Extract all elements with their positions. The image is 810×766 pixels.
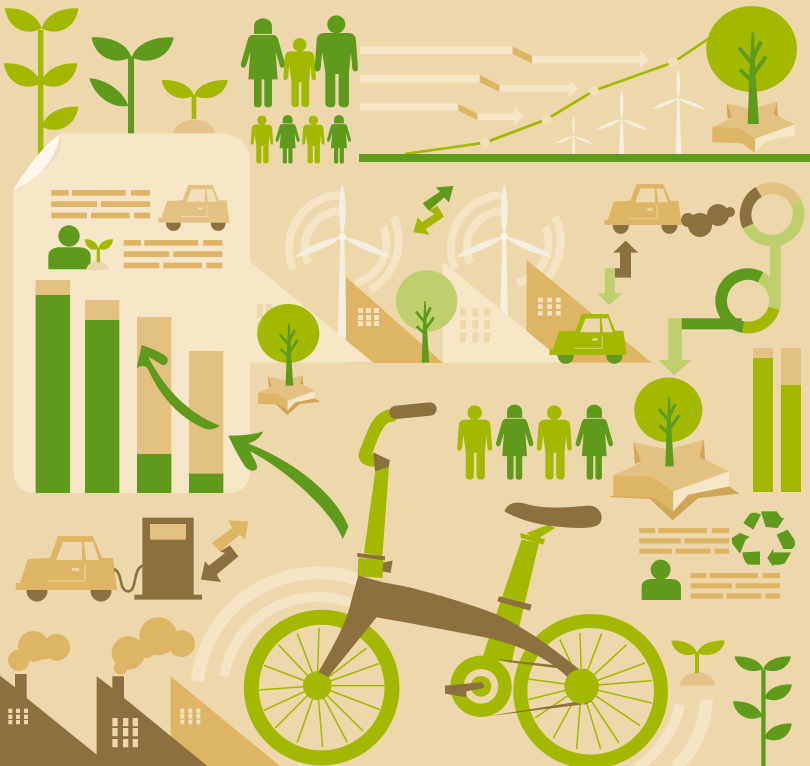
small people row [251,115,351,163]
arrow inside chart [137,345,220,429]
big curved arrow [228,431,348,539]
page curl [13,134,60,189]
bar chart [36,280,223,493]
upper ring [746,188,799,241]
handlebar grip [396,409,430,412]
wind flow arrows [360,47,649,125]
family of people icons [241,15,358,163]
icon: car in document [158,185,229,231]
saddle [504,503,602,528]
icon: lime car [550,314,627,364]
zigzag double arrow green [413,186,453,235]
tan factory [171,676,280,766]
wind turbine right with arcs [451,184,561,338]
plant: small seedling in soil [162,80,228,134]
front wheel [251,617,392,758]
light green tree [396,270,457,363]
tree on small star [256,304,320,415]
smoke clouds left [8,631,70,671]
chain ring and chain [445,656,582,717]
text lines right [639,528,729,554]
plant: tall lime sprout [4,8,78,163]
plant: medium green sprout [89,37,173,135]
text lines [51,190,150,218]
person bust icon [48,225,91,269]
wind turbine left with arcs [289,184,399,338]
bicycle [251,409,661,762]
exhaust smoke [681,204,735,237]
rear wheel [520,621,661,762]
rear hub [564,669,599,704]
icon: brown car [605,184,682,234]
down arrow to tree [658,318,692,375]
page curl shadow [13,134,62,189]
man [315,15,358,107]
person bust icon lower [642,560,681,600]
brown factories [0,674,207,766]
big tree on star [706,6,797,153]
icon: fuel pump [114,518,202,600]
ground line [359,154,810,162]
down arrow light green [597,268,622,305]
faded windows behind tree [257,304,272,336]
icon: car at fuel pump [16,536,117,602]
growth line with dots [405,37,712,154]
ring connector diagram [682,188,799,329]
small wind turbines [554,68,705,155]
lower ring [721,274,775,327]
recycle icon [732,511,795,567]
child [283,38,316,107]
tan house right [527,260,652,363]
plant: small seedling bottom [671,641,725,686]
paper triangle extension [250,262,373,363]
frame [318,576,582,678]
seat clamp [497,596,532,611]
up arrow brown [613,241,638,278]
tree on large star [609,378,739,520]
seat tube [482,525,555,663]
zigzag double arrow tan and brown [201,520,248,582]
text lines lower [124,240,222,268]
tan house left [346,277,443,363]
small seedling [85,239,113,270]
smoke clouds right [112,617,195,675]
right bars [753,348,801,492]
arcs behind rear wheel [637,700,707,766]
cream house [443,262,565,363]
plant: tall green sprout bottom [733,656,792,766]
document panel [13,133,373,493]
woman [241,18,285,107]
text lines lower right [691,573,780,599]
sound arcs behind front wheel [197,573,358,681]
steering tube [357,415,393,578]
people row [457,405,613,480]
